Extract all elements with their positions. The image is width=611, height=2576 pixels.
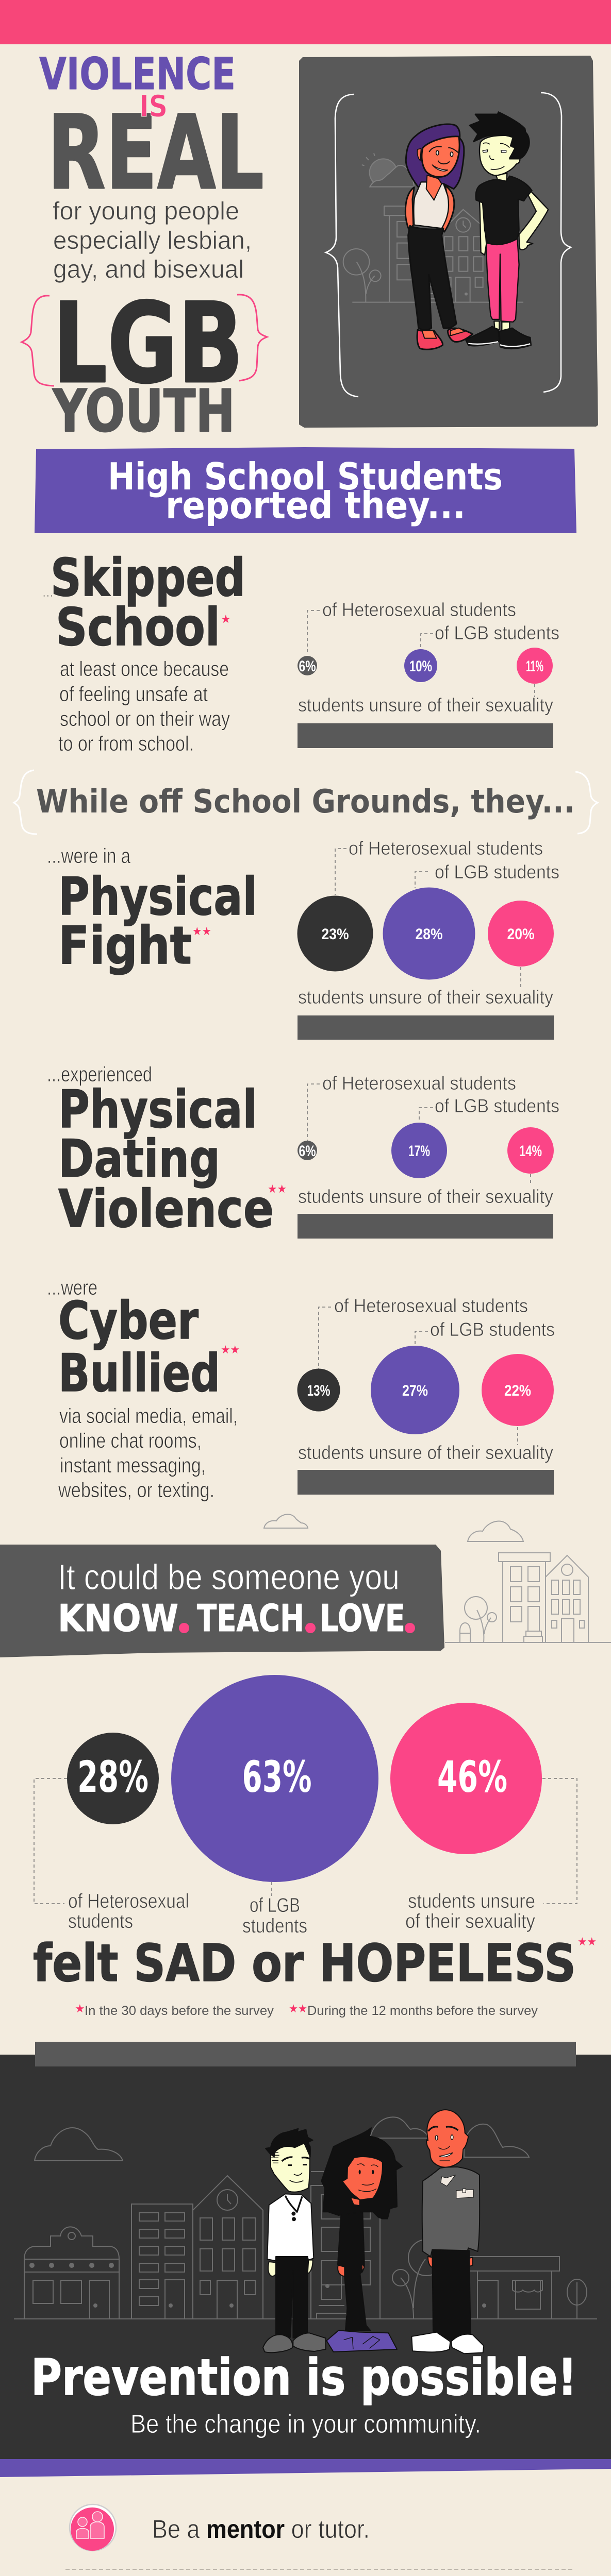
town line art at ribbon [445, 1553, 611, 1642]
character: man in gray sweater [411, 2110, 484, 2353]
clouds above ribbon [264, 1514, 523, 1541]
banner: high school students [35, 447, 576, 533]
bubble labels [68, 1890, 535, 1937]
gray bar [298, 723, 553, 748]
character: woman [405, 124, 473, 349]
chart: skipped school bubbles: 10% [409, 658, 432, 675]
section: felt sad or hopeless [33, 1675, 597, 2018]
subtitle [53, 197, 252, 283]
chart: big bubbles: 46% [437, 1752, 507, 1802]
chart: dating violence bubbles: 17% [408, 1143, 430, 1160]
chart: physical fight bubbles: 23% [322, 926, 349, 943]
heading: skipped school: School [56, 597, 220, 657]
section: physical dating violence [47, 1062, 559, 1239]
character: man in white shirt [263, 2129, 326, 2352]
chart: cyber bullied bubbles: 22% [504, 1382, 531, 1399]
divider lines [65, 2569, 573, 2576]
heading: physical dating violence: Physical [58, 1079, 257, 1140]
subtitle: gay, and bisexual [53, 256, 244, 283]
title [22, 48, 267, 445]
description: instant messaging, [60, 1453, 206, 1477]
heading: skipped school: Skipped [51, 547, 245, 608]
bubble labels: of their sexuality [405, 1910, 535, 1933]
description: via social media, email, [59, 1404, 238, 1428]
chart: cyber bullied bubbles [297, 1295, 555, 1463]
chart: cyber bullied bubbles: 27% [402, 1382, 428, 1399]
heading: physical dating violence: Dating [58, 1128, 220, 1189]
character: person with long hair [321, 2128, 402, 2352]
heading: physical dating violence: ...experienced [47, 1062, 152, 1086]
chart: dating violence bubbles: students unsure of their sexuality [298, 1186, 553, 1207]
panel: prevention dark section [0, 2055, 611, 2462]
footnotes: ★ [75, 2003, 85, 2015]
section: cyber bullied [47, 1276, 555, 1502]
heading: cyber bullied: ★★ [221, 1344, 240, 1357]
chart: skipped school bubbles: of LGB students [435, 622, 559, 643]
description: online chat rooms, [59, 1429, 202, 1452]
description: websites, or texting. [58, 1478, 214, 1502]
chart: dating violence bubbles [298, 1073, 559, 1207]
ribbon: it could be someone you [0, 1545, 444, 1657]
white braces [326, 93, 571, 397]
description [58, 657, 230, 755]
banner: high school students: High School Students [108, 455, 503, 498]
bubble labels: of LGB [250, 1894, 300, 1917]
title word: is: IS [139, 89, 168, 124]
heading: cyber bullied: ...were [47, 1276, 97, 1299]
purple divider strip [0, 2459, 611, 2477]
chart: big bubbles [34, 1675, 577, 1904]
bubble labels: of Heterosexual [68, 1890, 189, 1912]
know teach love: KNOW [58, 1597, 178, 1640]
chart: cyber bullied bubbles: of Heterosexual students [334, 1295, 528, 1316]
chart: physical fight bubbles: students unsure of their sexuality [298, 987, 553, 1008]
heading: physical fight: ★★ [192, 925, 211, 938]
gray bar [298, 1015, 554, 1040]
faint town behind couple [343, 153, 523, 302]
heading: physical fight [47, 844, 257, 976]
heading: felt sad or hopeless: ★★ [577, 1936, 597, 1948]
heading: cyber bullied [47, 1276, 240, 1403]
heading: physical fight: Physical [58, 866, 257, 927]
footnotes: ★★ [289, 2003, 307, 2015]
footnotes: During the 12 months before the survey [307, 2004, 538, 2018]
bubble labels: students [68, 1910, 133, 1933]
title word: LGB: LGB [53, 279, 243, 408]
chart: physical fight bubbles: 28% [416, 926, 442, 943]
title word: real: REAL [47, 93, 264, 212]
ribbon: it could be someone you: It could be someone you [58, 1557, 400, 1597]
chart: skipped school bubbles: of Heterosexual students [322, 599, 516, 620]
chart: physical fight bubbles [297, 838, 559, 1008]
description: at least once because [60, 657, 229, 681]
chart: big bubbles: 63% [242, 1752, 311, 1802]
bubble labels: students [242, 1915, 307, 1937]
know teach love: TEACH [197, 1597, 304, 1640]
description: school or on their way [60, 707, 230, 731]
footnotes: In the 30 days before the survey [85, 2004, 274, 2018]
item: mentor: Be a mentor or tutor. [152, 2515, 370, 2544]
character: teen in black tee [466, 112, 548, 349]
chart: skipped school bubbles: 11% [526, 658, 543, 675]
chart: skipped school bubbles [298, 599, 559, 716]
chart: physical fight bubbles: 20% [507, 926, 534, 943]
description: of feeling unsafe at [59, 682, 208, 706]
list: prevention actions [65, 2504, 573, 2576]
pink braces around LGB [22, 295, 267, 386]
banner: high school students: reported they... [166, 484, 466, 527]
description: to or from school. [58, 732, 194, 755]
description [58, 1404, 238, 1502]
heading: skipped school: ... [42, 584, 54, 600]
heading: physical dating violence [47, 1062, 287, 1239]
know teach love: LOVE [320, 1597, 405, 1640]
heading: while off school grounds [14, 770, 598, 834]
heading: cyber bullied: Cyber [58, 1290, 199, 1351]
top pink band [0, 0, 611, 44]
title word: violence: VIOLENCE [39, 48, 236, 100]
heading: skipped school [42, 547, 245, 657]
know teach love [58, 1597, 415, 1640]
chart: big bubbles: 28% [77, 1752, 148, 1802]
heading: skipped school: ★ [221, 613, 231, 626]
panel: couple illustration [299, 56, 598, 428]
chart: dating violence bubbles: 14% [519, 1143, 542, 1160]
gray bar [298, 1214, 553, 1239]
section: physical fight [47, 838, 559, 1040]
subheading: Be the change in your community. [130, 2409, 481, 2438]
item: mentor [70, 2504, 370, 2551]
chart: physical fight bubbles: of LGB students [435, 861, 559, 883]
chart: skipped school bubbles: 6% [299, 658, 316, 675]
title word: youth: YOUTH [52, 377, 235, 445]
chart: physical fight bubbles: of Heterosexual students [349, 838, 543, 859]
footnotes [75, 2003, 538, 2018]
heading: cyber bullied: Bullied [58, 1343, 220, 1403]
town line art dark [14, 2117, 597, 2319]
heading: physical dating violence: Violence [58, 1178, 274, 1239]
subtitle: for young people [53, 197, 239, 225]
chart: cyber bullied bubbles: students unsure of their sexuality [298, 1442, 553, 1463]
chart: dating violence bubbles: of Heterosexual students [322, 1073, 516, 1094]
heading: physical dating violence: ★★ [268, 1183, 287, 1196]
characters: three adults [263, 2110, 484, 2353]
chart: cyber bullied bubbles: 13% [307, 1382, 330, 1399]
gray bar [35, 2042, 576, 2066]
heading: physical fight: ...were in a [47, 844, 130, 868]
gray bar [298, 1470, 554, 1495]
heading: while off school grounds: While off School Grounds, they... [36, 783, 575, 820]
chart: dating violence bubbles: of LGB students [435, 1095, 559, 1116]
subtitle: especially lesbian, [53, 227, 252, 255]
chart: skipped school bubbles: students unsure of their sexuality [298, 694, 553, 716]
chart: cyber bullied bubbles: of LGB students [430, 1319, 555, 1340]
chart: dating violence bubbles: 6% [299, 1143, 316, 1160]
heading: physical fight: Fight [58, 915, 192, 976]
bubble labels: students unsure [408, 1890, 535, 1912]
section: skipped school [42, 547, 559, 755]
